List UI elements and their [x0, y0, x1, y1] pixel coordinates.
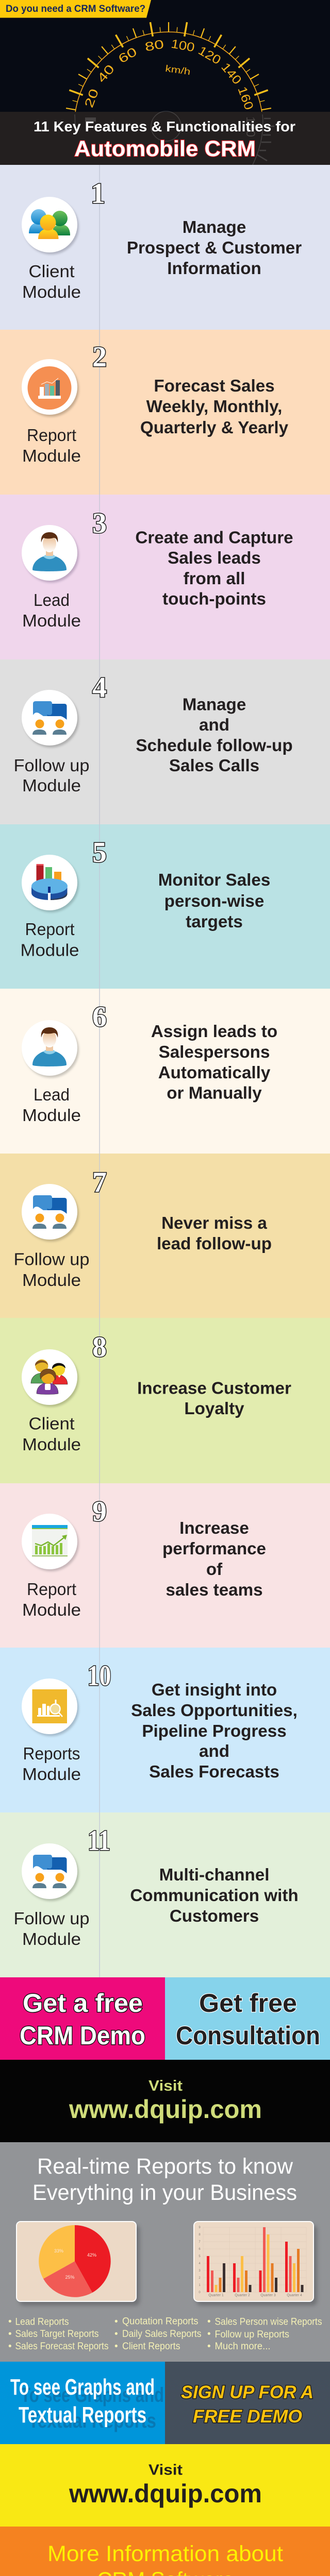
module label: Report	[27, 426, 76, 445]
report list: Quotation Reports	[122, 2316, 198, 2327]
feature text	[137, 1379, 291, 1418]
feature text: Increase	[179, 1519, 249, 1538]
module label	[22, 426, 81, 465]
tag: do you need a CRM software	[0, 0, 151, 18]
feature text	[136, 696, 293, 775]
feature text: Create and Capture	[135, 529, 293, 547]
title band: Automobile CRM	[74, 137, 256, 161]
feature text: Automatically	[158, 1063, 271, 1082]
bar chart card: Quarter 1	[208, 2294, 224, 2297]
feature text: Increase Customer	[137, 1379, 291, 1398]
module label: Reports	[23, 1744, 80, 1763]
callout: sign up for a free demo: SIGN UP FOR A	[181, 2382, 314, 2402]
feature text	[162, 1519, 266, 1600]
feature text: Manage	[183, 696, 246, 714]
bar chart card: 7	[199, 2241, 201, 2244]
callout: get free consultation: Consultation	[176, 2021, 320, 2050]
feature text: Prospect & Customer	[127, 239, 302, 258]
number 6: 6	[92, 1001, 107, 1033]
module label	[22, 590, 81, 630]
report list: •	[114, 2329, 118, 2340]
icon: growth chart	[22, 1514, 79, 1571]
module label: Module	[22, 776, 81, 795]
feature text: Assign leads to	[151, 1022, 277, 1041]
report list: •	[8, 2341, 12, 2352]
number 5: 5	[92, 837, 107, 869]
module label: Follow up	[13, 1250, 90, 1268]
module label: Follow up	[13, 756, 90, 775]
number 9: 9	[92, 1496, 107, 1528]
feature text: or Manually	[167, 1084, 262, 1103]
feature text	[158, 871, 270, 931]
feature text: Sales Calls	[169, 756, 259, 775]
module label	[22, 1085, 81, 1125]
feature text: performance	[162, 1539, 266, 1558]
module label: Module	[22, 1106, 81, 1125]
report list: •	[114, 2341, 118, 2352]
module label: Module	[22, 611, 81, 630]
panel: feature 2	[0, 330, 330, 495]
module label: Follow up	[13, 1909, 90, 1928]
number 1: 1	[91, 178, 105, 210]
module label: Lead	[34, 1085, 70, 1104]
report list: Daily Sales Reports	[122, 2329, 201, 2340]
header: speedometer: 20	[82, 87, 102, 110]
feature text: Schedule follow-up	[136, 736, 293, 755]
feature text: Sales Forecasts	[149, 1762, 279, 1782]
title band	[0, 111, 330, 165]
callout: get free consultation: Get free	[199, 1989, 297, 2018]
callout: get a free CRM demo	[0, 1977, 165, 2060]
feature text: Communication with	[130, 1886, 299, 1905]
feature text	[127, 218, 302, 278]
panel: visit website yellow: www.dquip.com	[69, 2479, 262, 2508]
report list: Follow up Reports	[214, 2329, 289, 2340]
feature text: and	[199, 716, 229, 735]
feature text: targets	[186, 912, 243, 931]
panel: visit website black	[0, 2060, 330, 2142]
header: speedometer: 120	[196, 44, 223, 67]
bar chart card: Quarter 3	[260, 2294, 276, 2297]
panel: visit website black: www.dquip.com	[69, 2095, 262, 2124]
feature text	[157, 1214, 272, 1253]
panel: real-time reports	[0, 2142, 330, 2362]
panel: feature 10	[0, 1648, 330, 1812]
callout: graphs and textual reports: Textual Reports	[19, 2402, 146, 2428]
feature text: Weekly, Monthly,	[146, 397, 282, 416]
panel: more information	[0, 2527, 330, 2576]
callout: graphs and textual reports: To see Graphs and	[10, 2375, 155, 2400]
module label: Lead	[34, 590, 70, 609]
header: speedometer: 60	[116, 45, 140, 66]
panel: feature 3	[0, 495, 330, 659]
module label	[13, 756, 90, 795]
module label	[21, 920, 79, 959]
callout: sign up for a free demo: FREE DEMO	[193, 2406, 302, 2427]
module label	[22, 262, 81, 301]
feature text	[140, 377, 289, 437]
header: speedometer: 80	[144, 37, 165, 54]
feature text: Multi-channel	[159, 1866, 269, 1885]
icon: pie and bars	[22, 855, 79, 912]
feature text: Sales Opportunities,	[131, 1701, 298, 1720]
report list: Sales Target Reports	[15, 2329, 99, 2340]
feature text: Monitor Sales	[158, 871, 270, 890]
module label: Client	[29, 262, 74, 281]
feature text	[131, 1681, 298, 1782]
panel: feature 7	[0, 1154, 330, 1318]
feature text: Manage	[183, 218, 246, 237]
callout: sign up for a free demo	[165, 2362, 330, 2444]
report list: Much more...	[214, 2341, 270, 2352]
module label: Module	[22, 282, 81, 301]
module label: Module	[22, 1929, 81, 1948]
report list: Sales Person wise Reports	[214, 2316, 322, 2328]
feature text	[151, 1022, 277, 1103]
report list: Lead Reports	[15, 2316, 69, 2328]
icon: follow up	[22, 1843, 79, 1901]
bar chart card: 3	[199, 2269, 201, 2273]
heading	[47, 2541, 283, 2576]
icon: report bars	[22, 359, 79, 417]
feature text: Sales leads	[168, 549, 261, 568]
callout: get a free CRM demo: Get a free	[23, 1989, 143, 2018]
number 2: 2	[92, 341, 107, 373]
panel: feature 6	[0, 989, 330, 1154]
icon: reports magnifier	[22, 1679, 79, 1736]
title band: 11 Key Features & Functionalities for	[34, 118, 295, 134]
module label: Module	[22, 1600, 81, 1619]
icon: follow up	[22, 1184, 79, 1242]
number 10: 10	[88, 1660, 111, 1692]
module label	[22, 1744, 81, 1784]
bar chart card	[194, 2222, 317, 2306]
report list: •	[207, 2316, 211, 2327]
feature text: Forecast Sales	[154, 377, 275, 396]
header: speedometer: 100	[170, 37, 196, 55]
bar chart card: 1	[199, 2284, 201, 2287]
icon: lead person	[22, 525, 79, 583]
icon: client group	[22, 197, 79, 255]
bar chart card: Quarter 2	[235, 2294, 250, 2297]
panel: feature 8	[0, 1318, 330, 1483]
tag: do you need a CRM software: Do you need a CRM Software?	[6, 4, 145, 14]
header: speedometer	[0, 0, 330, 221]
module label: Report	[27, 1580, 76, 1599]
report list: •	[207, 2341, 211, 2352]
module label	[22, 1580, 81, 1619]
pie chart card: 42%	[87, 2252, 96, 2258]
icon: lead person	[22, 1020, 79, 1078]
icon: follow up	[22, 690, 79, 748]
heading: Real-time Reports to know	[37, 2154, 293, 2179]
report list	[8, 2316, 322, 2352]
panel: feature 11	[0, 1812, 330, 1977]
module label: Module	[22, 1765, 81, 1784]
pie chart card: 33%	[54, 2248, 63, 2253]
panel: visit website yellow	[0, 2444, 330, 2527]
feature text: from all	[184, 569, 245, 588]
module label: Module	[22, 1435, 81, 1454]
header: speedometer: 140	[218, 60, 244, 87]
feature text	[135, 529, 293, 609]
panel: visit website black: Visit	[148, 2078, 183, 2094]
title band: 180	[243, 116, 257, 137]
feature text: lead follow-up	[157, 1234, 272, 1253]
report list: •	[8, 2329, 12, 2340]
module label: Module	[22, 446, 81, 465]
bar chart card: 0	[199, 2291, 201, 2294]
callout: graphs and textual reports: To see Graphs and	[21, 2384, 164, 2406]
feature text: Customers	[170, 1907, 259, 1926]
feature text	[130, 1866, 299, 1926]
panel: feature 9	[0, 1483, 330, 1648]
header: speedometer: 160	[235, 85, 256, 112]
panel: visit website yellow: Visit	[148, 2462, 183, 2478]
feature text: of	[206, 1560, 223, 1579]
bar chart card: 9	[199, 2226, 201, 2229]
module label: Module	[22, 1270, 81, 1290]
number 7: 7	[92, 1166, 107, 1198]
report list: •	[207, 2329, 211, 2340]
bar chart card: 4	[199, 2262, 201, 2265]
bar chart card: 6	[199, 2248, 201, 2251]
heading: Everything in your Business	[32, 2180, 297, 2205]
feature text: person-wise	[164, 892, 264, 911]
header: speedometer: km/h	[164, 63, 191, 77]
report list: •	[114, 2316, 118, 2327]
module label: Report	[25, 920, 74, 939]
report list: Client Reports	[122, 2341, 180, 2352]
feature text: Loyalty	[184, 1399, 244, 1418]
feature text: Quarterly & Yearly	[140, 418, 289, 437]
icon: customers	[22, 1349, 79, 1407]
module label: Client	[29, 1414, 74, 1433]
bar chart card: 8	[199, 2233, 201, 2236]
module label	[22, 1414, 81, 1454]
number 8: 8	[92, 1331, 107, 1363]
feature text: Get insight into	[152, 1681, 277, 1700]
heading: More Information about	[47, 2541, 283, 2566]
bar chart card: 2	[199, 2277, 201, 2280]
feature text: touch-points	[162, 589, 266, 609]
report list: •	[8, 2316, 12, 2327]
panel: feature 5	[0, 824, 330, 989]
feature text: Salespersons	[159, 1043, 270, 1062]
callout: get free consultation	[165, 1977, 330, 2060]
pie chart card	[16, 2222, 140, 2306]
number 11: 11	[88, 1825, 110, 1857]
feature text: Pipeline Progress	[142, 1722, 287, 1741]
panel: feature 1	[0, 165, 330, 330]
panel: feature 4	[0, 659, 330, 824]
feature text: sales teams	[166, 1581, 263, 1600]
module label	[13, 1909, 90, 1948]
callout: graphs and textual reports	[0, 2362, 165, 2444]
header: speedometer: 40	[94, 62, 118, 86]
module label: Module	[21, 941, 79, 959]
heading	[32, 2154, 297, 2205]
feature text: Information	[167, 259, 261, 278]
report list: Sales Forecast Reports	[15, 2341, 108, 2352]
feature text: and	[199, 1742, 229, 1761]
module label	[13, 1250, 90, 1290]
number 3: 3	[92, 507, 107, 539]
number 4: 4	[92, 672, 107, 704]
bar chart card: Quarter 4	[287, 2294, 302, 2297]
callout: graphs and textual reports: Textual Reports	[28, 2410, 156, 2432]
bar chart card: 5	[199, 2255, 201, 2258]
feature text: Never miss a	[161, 1214, 267, 1233]
pie chart card: 25%	[65, 2275, 75, 2280]
callout: get a free CRM demo: CRM Demo	[20, 2021, 145, 2050]
